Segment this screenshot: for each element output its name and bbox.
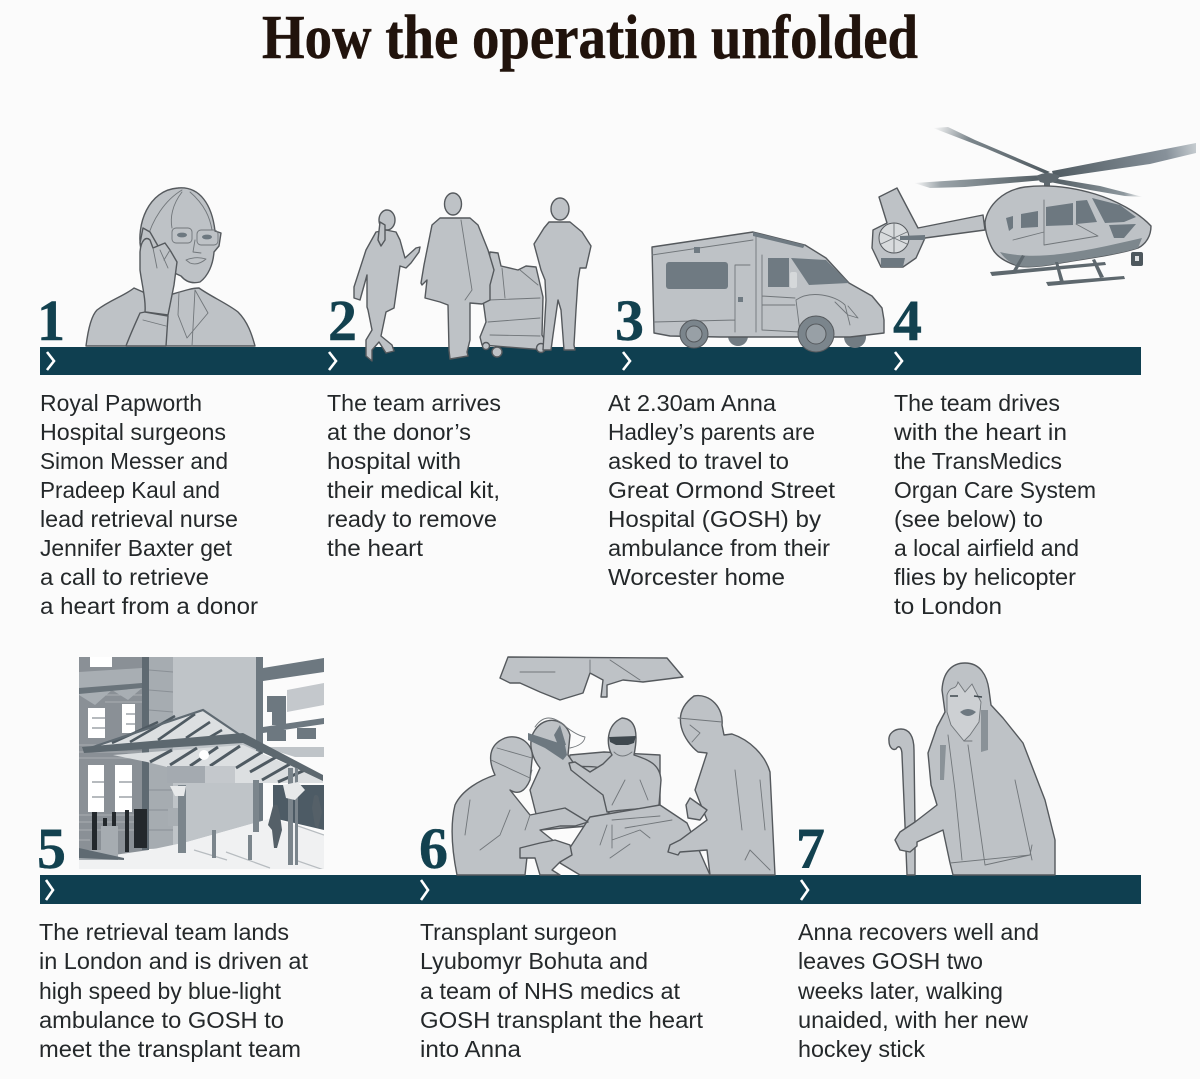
illustration: helicopter <box>872 127 1196 286</box>
illustration: hospital entrance canopy <box>79 657 324 870</box>
step 7 text <box>797 919 1039 1062</box>
step 4 text: the TransMedics <box>894 448 1062 474</box>
step 4 text: a local airfield and <box>894 535 1079 561</box>
step 3 text: Great Ormond Street <box>608 477 836 503</box>
number 7: 7 <box>796 816 825 881</box>
panel: step 2 <box>327 193 591 561</box>
step 2 text: hospital with <box>327 448 461 474</box>
illustration: ambulance <box>652 232 884 352</box>
step 3 text: Worcester home <box>608 564 785 590</box>
step 3 text: At 2.30am Anna <box>608 390 776 416</box>
step 4 text: (see below) to <box>894 506 1043 532</box>
number 1: 1 <box>37 288 65 353</box>
step 6 text: Transplant surgeon <box>420 919 617 945</box>
step 6 text: GOSH transplant the heart <box>420 1007 704 1033</box>
illustration: surgeons in operating theatre <box>452 657 775 875</box>
illustration: surgeon on phone <box>86 188 255 346</box>
number 2: 2 <box>328 288 357 353</box>
timeline bar: bottom row <box>40 875 1141 904</box>
step 7 text: leaves GOSH two <box>798 948 983 974</box>
panel: step 4 <box>872 127 1196 619</box>
panel: step 6 <box>419 657 775 1062</box>
step 5 text: high speed by blue-light <box>39 978 282 1004</box>
panel: step 1 <box>37 188 258 619</box>
step 4 text: The team drives <box>894 390 1060 416</box>
step 7 text: hockey stick <box>798 1036 926 1062</box>
step 2 text: The team arrives <box>327 390 501 416</box>
illustration: retrieval team with medical cart <box>354 193 591 361</box>
step 2 text: their medical kit, <box>327 477 500 503</box>
step 4 text: flies by helicopter <box>894 564 1076 590</box>
step 4 text: with the heart in <box>893 419 1067 445</box>
step 4 text: to London <box>894 593 1002 619</box>
number 3: 3 <box>615 288 644 353</box>
step 4 text: Organ Care System <box>894 477 1096 503</box>
step 1 text: a call to retrieve <box>40 564 209 590</box>
step 5 text: The retrieval team lands <box>39 919 289 945</box>
number 6: 6 <box>419 816 448 881</box>
step 1 text: lead retrieval nurse <box>40 506 238 532</box>
step 6 text: into Anna <box>420 1036 521 1062</box>
step 1 text: a heart from a donor <box>40 593 258 619</box>
step 5 text <box>39 919 309 1062</box>
step 2 text <box>327 390 501 561</box>
panel: step 3 <box>608 232 884 590</box>
step 1 text: Hospital surgeons <box>40 419 226 445</box>
step 3 text: ambulance from their <box>608 535 830 561</box>
title: How the operation unfolded <box>262 4 918 72</box>
step 7 text: Anna recovers well and <box>798 919 1039 945</box>
step 5 text: meet the transplant team <box>39 1036 301 1062</box>
step 7 text: unaided, with her new <box>798 1007 1028 1033</box>
step 1 text: Jennifer Baxter get <box>40 535 233 561</box>
step 6 text <box>420 919 704 1062</box>
step 3 text: Hadley’s parents are <box>608 419 815 445</box>
step 2 text: the heart <box>327 535 424 561</box>
step 6 text: a team of NHS medics at <box>420 978 681 1004</box>
step 5 text: ambulance to GOSH to <box>39 1007 284 1033</box>
step 1 text <box>40 390 258 619</box>
step 4 text <box>893 390 1096 619</box>
step 1 text: Pradeep Kaul and <box>40 477 220 503</box>
step 7 text: weeks later, walking <box>797 978 1003 1004</box>
step 5 text: in London and is driven at <box>39 948 309 974</box>
panel: step 5 <box>37 657 324 1062</box>
step 3 text <box>608 390 836 590</box>
timeline bar: top row <box>40 347 1141 375</box>
step 3 text: Hospital (GOSH) by <box>608 506 822 532</box>
step 1 text: Simon Messer and <box>40 448 228 474</box>
illustration: Anna with hockey stick <box>889 663 1055 875</box>
panel: step 7 <box>796 663 1055 1062</box>
number 4: 4 <box>893 288 922 353</box>
step 3 text: asked to travel to <box>608 448 789 474</box>
step 6 text: Lyubomyr Bohuta and <box>420 948 648 974</box>
step 2 text: ready to remove <box>327 506 497 532</box>
step 2 text: at the donor’s <box>327 419 471 445</box>
number 5: 5 <box>37 816 66 881</box>
step 1 text: Royal Papworth <box>40 390 202 416</box>
